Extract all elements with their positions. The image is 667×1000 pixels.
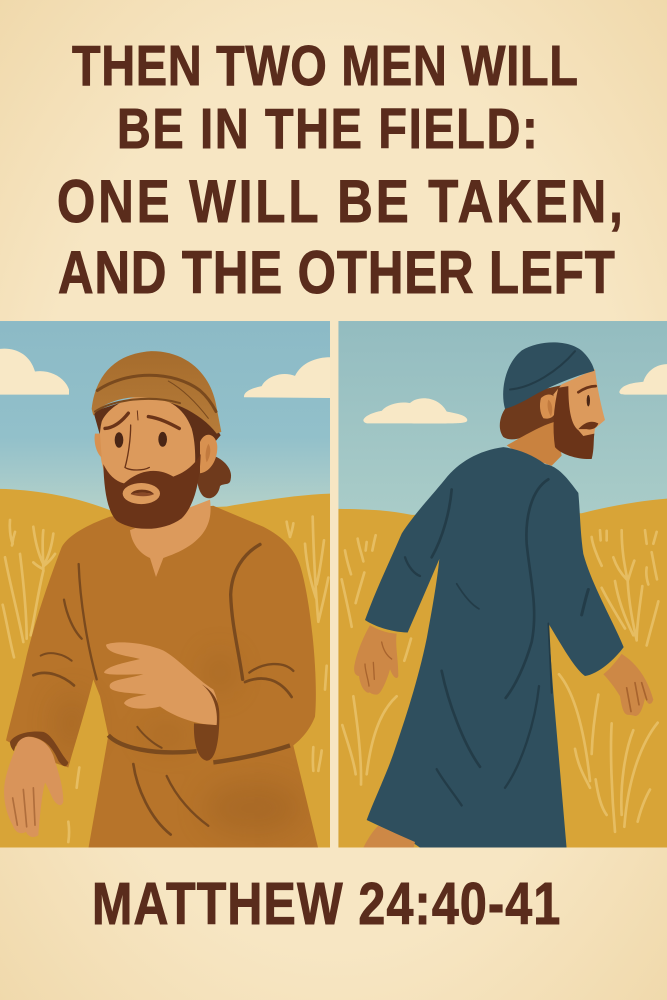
eyebrows and nose [105,411,179,470]
hand: lower left [4,737,63,837]
hand: across chest [104,642,218,725]
cloud: right [244,357,330,398]
trailing foot [360,826,415,856]
headcloth [92,351,221,434]
cuff: left sleeve [10,732,68,766]
title: ONE WILL BE TAKEN, [57,167,623,235]
eye and brow [587,395,590,406]
title: THEN TWO MEN WILL [72,35,578,98]
belt [108,735,290,762]
panel: right, man in blue walking away [338,321,667,856]
neck and collar [130,500,211,577]
tunic [6,506,318,849]
wheat stalks [342,530,658,832]
wheat stalks [3,517,328,842]
cloud: left [0,349,69,395]
tunic folds [33,544,293,835]
neck [507,422,562,466]
mouth [123,483,160,504]
ear [540,394,557,419]
panel: left, anxious man who remains in the field [0,321,330,856]
beard [103,454,201,529]
robe [365,447,624,849]
cloud: right [619,364,667,395]
beard [554,386,594,459]
ear [200,435,217,473]
wheat field [338,499,667,856]
robe folds [405,479,588,805]
hair bun [197,456,231,498]
citation: MATTHEW 24:40-41 [92,872,560,937]
hair under headcloth [94,402,221,462]
hand: right [603,654,653,716]
title: BE IN THE FIELD: [117,98,538,161]
wheat field [0,489,330,856]
title [57,35,623,306]
title: AND THE OTHER LEFT [58,238,615,306]
cuff: right sleeve [194,684,219,761]
sky [0,321,330,510]
eyes [115,432,123,448]
face [100,397,196,484]
face [553,369,605,440]
hair [500,384,565,439]
hand: left [354,625,398,695]
tunic shading [60,708,294,832]
sky [338,321,667,515]
cap [503,342,594,409]
cloud: centre [363,398,467,423]
